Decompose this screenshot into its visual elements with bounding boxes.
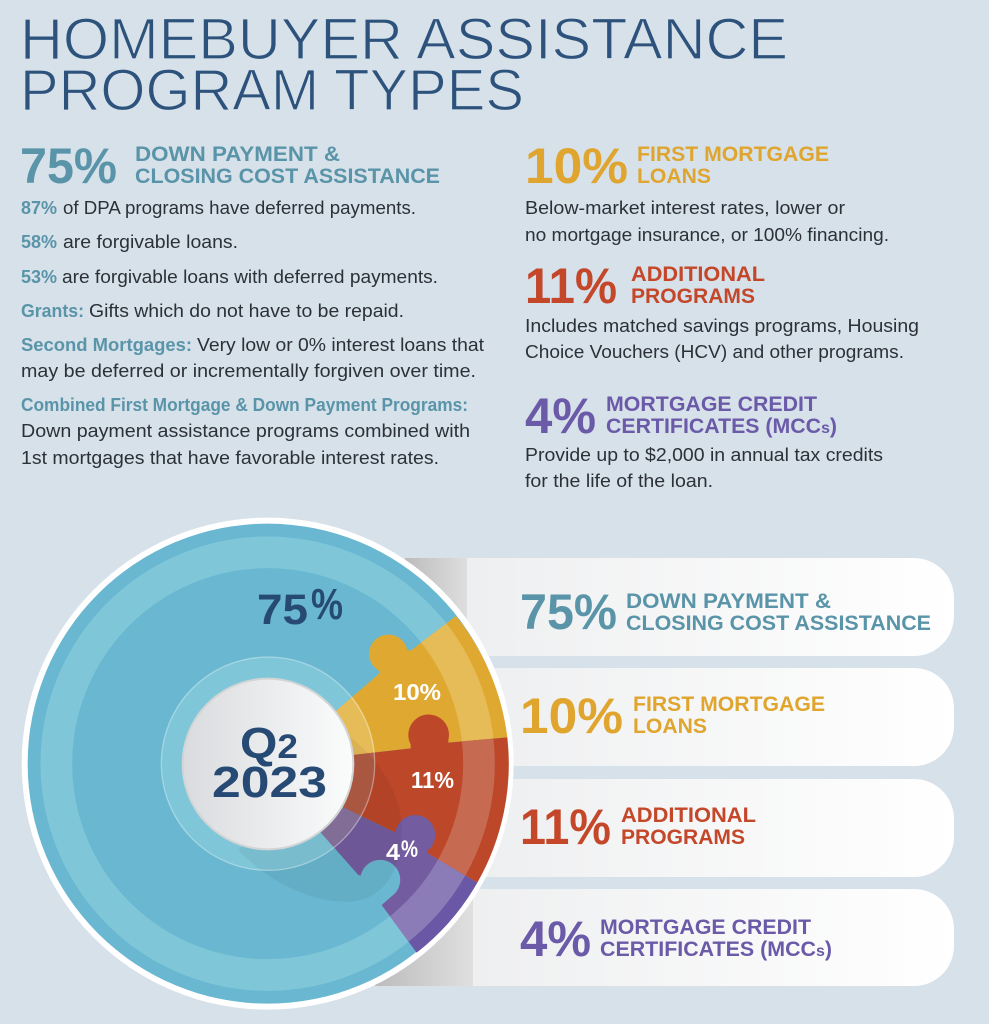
card: 10% legend: LOANS (633, 714, 707, 738)
label: 4%: % (401, 836, 418, 863)
hub shadow (238, 737, 402, 902)
text: combined programs: Down payment assistance programs combined with (21, 421, 470, 441)
card: 11% legend: PROGRAMS (621, 825, 745, 849)
panel: first mortgage loans: 10% (525, 138, 628, 194)
label: 4% (386, 836, 418, 865)
card: 75% legend: CLOSING COST ASSISTANCE (626, 611, 931, 635)
label: 11%: 11% (411, 767, 454, 793)
panel: additional programs: Choice Vouchers (HCV) and other programs. (525, 342, 904, 362)
panel: additional programs (525, 258, 919, 362)
slice: 4% mortgage credit certificates (320, 808, 478, 953)
panel: additional programs: PROGRAMS (631, 284, 755, 308)
panel: mortgage credit certificates: 4% (525, 388, 596, 444)
heading: 75% down payment: 75% (20, 138, 117, 194)
title: HOMEBUYER ASSISTANCE (20, 7, 788, 72)
hub circle (183, 679, 353, 849)
card: 4% legend (375, 889, 954, 986)
hub label: 2023 (212, 758, 327, 807)
text: combined programs (21, 395, 470, 468)
heading: 75% down payment: CLOSING COST ASSISTANCE (135, 164, 440, 188)
panel: mortgage credit certificates (525, 388, 883, 491)
label: 75% (257, 580, 343, 634)
text: combined programs: 1st mortgages that have favorable interest rates. (21, 448, 439, 468)
panel: first mortgage loans: LOANS (637, 164, 711, 188)
puzzle donut chart (22, 518, 514, 1010)
text: 87% deferred payments: of DPA programs have deferred payments. (63, 198, 416, 218)
text: grants: Gifts which do not have to be repaid. (89, 301, 404, 321)
text: second mortgages: Second Mortgages: (21, 335, 192, 355)
panel: first mortgage loans: Below-market interest rates, lower or (525, 198, 845, 218)
card: 75% legend: 75% (520, 584, 617, 640)
panel: first mortgage loans (525, 138, 889, 245)
panel: mortgage credit certificates: for the life of the loan. (525, 471, 713, 491)
panel: mortgage credit certificates: Provide up to $2,000 in annual tax credits (525, 445, 883, 465)
text: 53% forgivable with deferred: 53% (21, 267, 57, 287)
text: combined programs: Combined First Mortgage & Down Payment Programs: (21, 395, 468, 415)
heading: 75% down payment (20, 138, 440, 194)
text: 87% deferred payments: 87% (21, 198, 57, 218)
card: 75% legend: DOWN PAYMENT & (626, 589, 831, 613)
glass ring (161, 657, 375, 870)
text: 58% forgivable: 58% (21, 232, 57, 252)
card: 75% legend (405, 558, 954, 656)
slice: 11% additional programs (343, 714, 509, 882)
heading: 75% down payment: DOWN PAYMENT & (135, 142, 340, 166)
title (20, 7, 788, 123)
panel: mortgage credit certificates: MORTGAGE CREDIT (606, 392, 817, 416)
panel: additional programs: Includes matched savings programs, Housing (525, 316, 919, 336)
text: second mortgages: may be deferred or incrementally forgiven over time. (21, 361, 476, 381)
panel: mortgage credit certificates: CERTIFICATES (MCCs) (606, 414, 837, 438)
card: 10% legend: 10% (520, 688, 623, 744)
panel: first mortgage loans: no mortgage insurance, or 100% financing. (525, 225, 889, 245)
text: grants: Grants: (21, 301, 84, 321)
label: 10%: 10% (393, 679, 441, 705)
card: 4% legend: MORTGAGE CREDIT (600, 915, 811, 939)
card: 10% legend: FIRST MORTGAGE (633, 692, 825, 716)
panel: first mortgage loans: FIRST MORTGAGE (637, 142, 829, 166)
slice: 10% first mortgage (336, 616, 508, 755)
title: PROGRAM TYPES (20, 58, 524, 123)
hub label: Q2 (240, 719, 298, 768)
label: 4%: 4 (386, 839, 400, 865)
hub label (212, 719, 327, 807)
label: 75%: 75 (257, 586, 308, 634)
text: second mortgages (21, 335, 484, 381)
panel: additional programs: ADDITIONAL (631, 262, 765, 286)
card: 11% legend: ADDITIONAL (621, 803, 756, 827)
card: 10% legend (480, 668, 954, 766)
card: 4% legend: CERTIFICATES (MCCs) (600, 937, 832, 961)
label: 75%: % (311, 580, 343, 629)
text: 53% forgivable with deferred: are forgivable loans with deferred payments. (62, 267, 438, 287)
card: 11% legend: 11% (520, 799, 611, 855)
panel: additional programs: 11% (525, 258, 617, 314)
card: 11% legend (480, 779, 954, 877)
text: 58% forgivable: are forgivable loans. (63, 232, 238, 252)
panel: down payment and closing cost assistance (20, 138, 484, 468)
text: second mortgages: Very low or 0% interest loans that (197, 335, 484, 355)
card: 4% legend: 4% (520, 911, 591, 967)
chart base disc (22, 518, 514, 1010)
